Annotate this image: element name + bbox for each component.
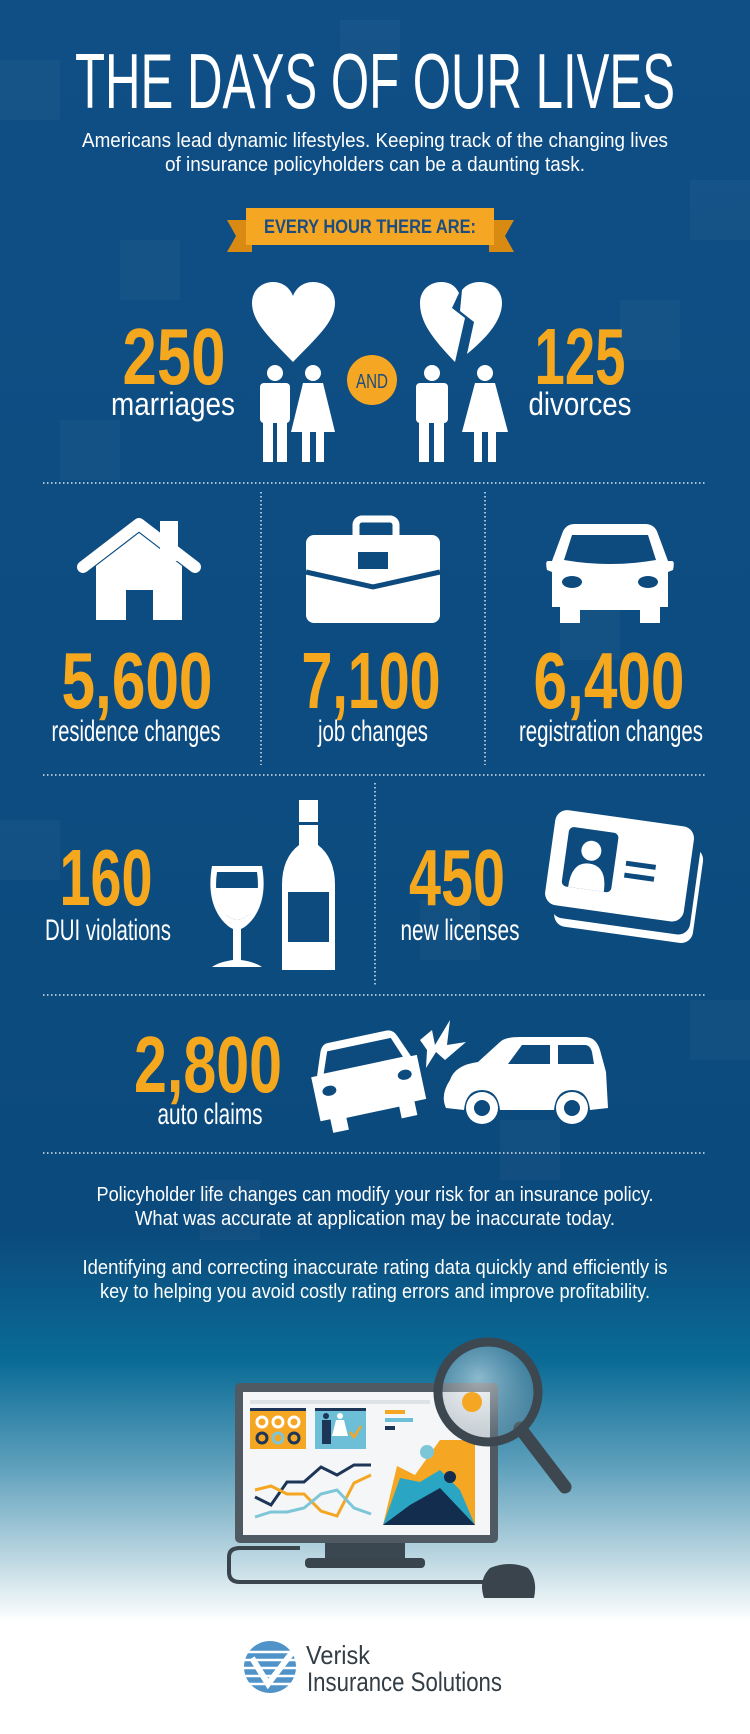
panel: job changes bbox=[302, 519, 440, 748]
icon: car front bbox=[546, 524, 674, 623]
icon: broken heart bbox=[420, 282, 502, 362]
text block: conclusion bbox=[82, 1184, 668, 1303]
icon: wine bottle bbox=[282, 800, 335, 970]
subtitle bbox=[82, 130, 668, 176]
stat: 125 divorces: divorces bbox=[528, 386, 632, 422]
icon: couple bbox=[260, 365, 335, 462]
panel: residence changes bbox=[52, 521, 220, 748]
icon: heart bbox=[252, 282, 335, 362]
panel: auto claims: 2,800 bbox=[134, 1020, 282, 1109]
illustration: computer with charts and magnifier bbox=[229, 1342, 565, 1598]
icon: crashing cars bbox=[305, 1020, 608, 1135]
logo: Verisk Insurance Solutions: Verisk bbox=[306, 1640, 371, 1670]
icon: ID cards bbox=[541, 809, 707, 945]
icon: separated couple bbox=[416, 365, 508, 462]
panel: auto claims bbox=[134, 1020, 608, 1135]
panel: residence changes: residence changes bbox=[52, 715, 220, 748]
stat: 250 marriages: 250 bbox=[122, 312, 226, 401]
text block: conclusion: Policyholder life changes can modify your risk for an insurance policy. bbox=[96, 1184, 654, 1206]
icon: briefcase bbox=[306, 519, 440, 623]
AND badge bbox=[347, 355, 397, 405]
ribbon: every hour bbox=[227, 208, 514, 252]
panel: job changes: job changes bbox=[317, 715, 428, 748]
logo: Verisk Insurance Solutions: Insurance Solutions bbox=[307, 1667, 502, 1697]
stat: 250 marriages: marriages bbox=[111, 386, 235, 422]
stat: 250 marriages bbox=[111, 312, 235, 422]
subtitle: Americans lead dynamic lifestyles. Keeping track of the changing lives bbox=[82, 130, 668, 152]
text block: conclusion: key to helping you avoid costly rating errors and improve profitability. bbox=[100, 1281, 650, 1303]
panel: new licenses bbox=[400, 809, 707, 947]
icon: house bbox=[83, 521, 195, 620]
panel: DUI violations: 160 bbox=[60, 833, 152, 922]
stat: 125 divorces bbox=[528, 312, 632, 422]
text block: conclusion: What was accurate at application may be inaccurate today. bbox=[135, 1208, 615, 1230]
subtitle: of insurance policyholders can be a daunting task. bbox=[165, 154, 585, 176]
ribbon: every hour: EVERY HOUR THERE ARE: bbox=[264, 217, 476, 238]
panel: auto claims: auto claims bbox=[158, 1098, 262, 1131]
panel: residence changes: 5,600 bbox=[62, 636, 212, 725]
panel: DUI violations: DUI violations bbox=[45, 914, 171, 947]
panel: DUI violations bbox=[45, 800, 335, 970]
text block: conclusion: Identifying and correcting inaccurate rating data quickly and efficiently is bbox=[82, 1257, 668, 1279]
logo: Verisk Insurance Solutions bbox=[244, 1640, 502, 1697]
stat: 125 divorces: 125 bbox=[534, 312, 626, 401]
AND badge: AND bbox=[356, 371, 388, 393]
icon: wine glass bbox=[210, 866, 264, 967]
panel: job changes: 7,100 bbox=[302, 636, 440, 725]
panel: registration changes bbox=[519, 524, 703, 748]
panel: registration changes: 6,400 bbox=[534, 636, 684, 725]
panel: new licenses: 450 bbox=[409, 833, 505, 922]
panel: new licenses: new licenses bbox=[400, 914, 520, 947]
